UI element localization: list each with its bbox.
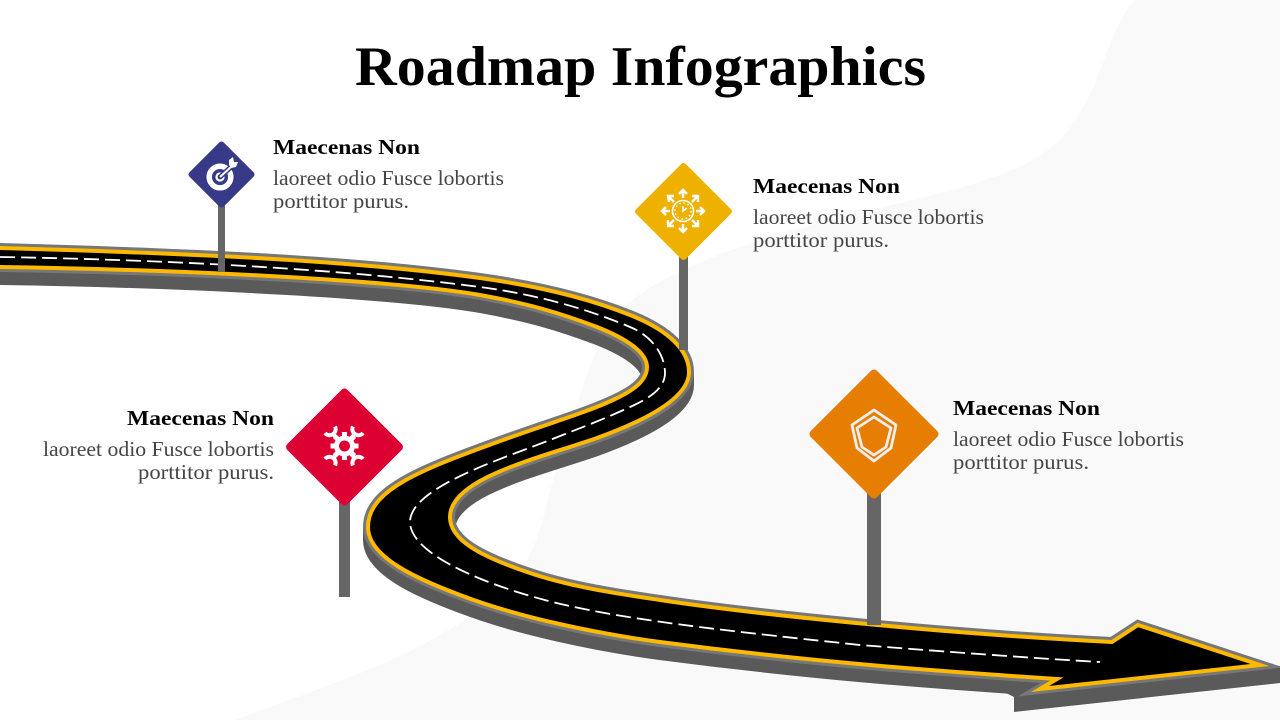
text block 3 (43, 406, 274, 484)
body line 2: porttitor purus. (273, 189, 409, 213)
body line 2: porttitor purus. (138, 460, 274, 484)
icon: clock with radiating arrows (662, 190, 704, 232)
pole (218, 200, 225, 272)
heading: Maecenas Non (953, 396, 1100, 420)
body: laoreet odio Fusce lobortis (753, 205, 984, 229)
road surface with yellow edge lines (0, 248, 1260, 689)
heading: Maecenas Non (273, 135, 420, 159)
road side wall (0, 272, 1008, 694)
icon: shield (852, 410, 896, 461)
road (0, 248, 1280, 712)
heading: Maecenas Non (127, 406, 274, 430)
icon: target and arrow (209, 157, 238, 188)
diamond (808, 368, 940, 500)
diamond (634, 162, 733, 261)
sign 4: shield (808, 368, 940, 625)
diamond (187, 140, 256, 209)
body: laoreet odio Fusce lobortis (953, 427, 1184, 451)
arrowhead side wall (1000, 666, 1280, 712)
heading: Maecenas Non (753, 174, 900, 198)
icon: gear and wrenches (325, 426, 363, 466)
text block 4 (953, 396, 1184, 474)
body line 2: porttitor purus. (753, 228, 889, 252)
body: laoreet odio Fusce lobortis (273, 166, 504, 190)
pole (339, 498, 350, 597)
body line 2: porttitor purus. (953, 450, 1089, 474)
text block 2 (753, 174, 984, 252)
pole (679, 250, 688, 350)
sign 2: clock with arrows (634, 162, 733, 350)
text block 1 (273, 135, 504, 213)
diamond (284, 387, 405, 507)
centre dashed line (0, 257, 1100, 662)
title: Roadmap Infographics (355, 36, 926, 98)
road shoulder (0, 248, 1260, 689)
body: laoreet odio Fusce lobortis (43, 437, 274, 461)
sign 3: gear and wrenches (284, 387, 405, 597)
pole (867, 490, 881, 625)
sign 1: target (187, 140, 256, 272)
